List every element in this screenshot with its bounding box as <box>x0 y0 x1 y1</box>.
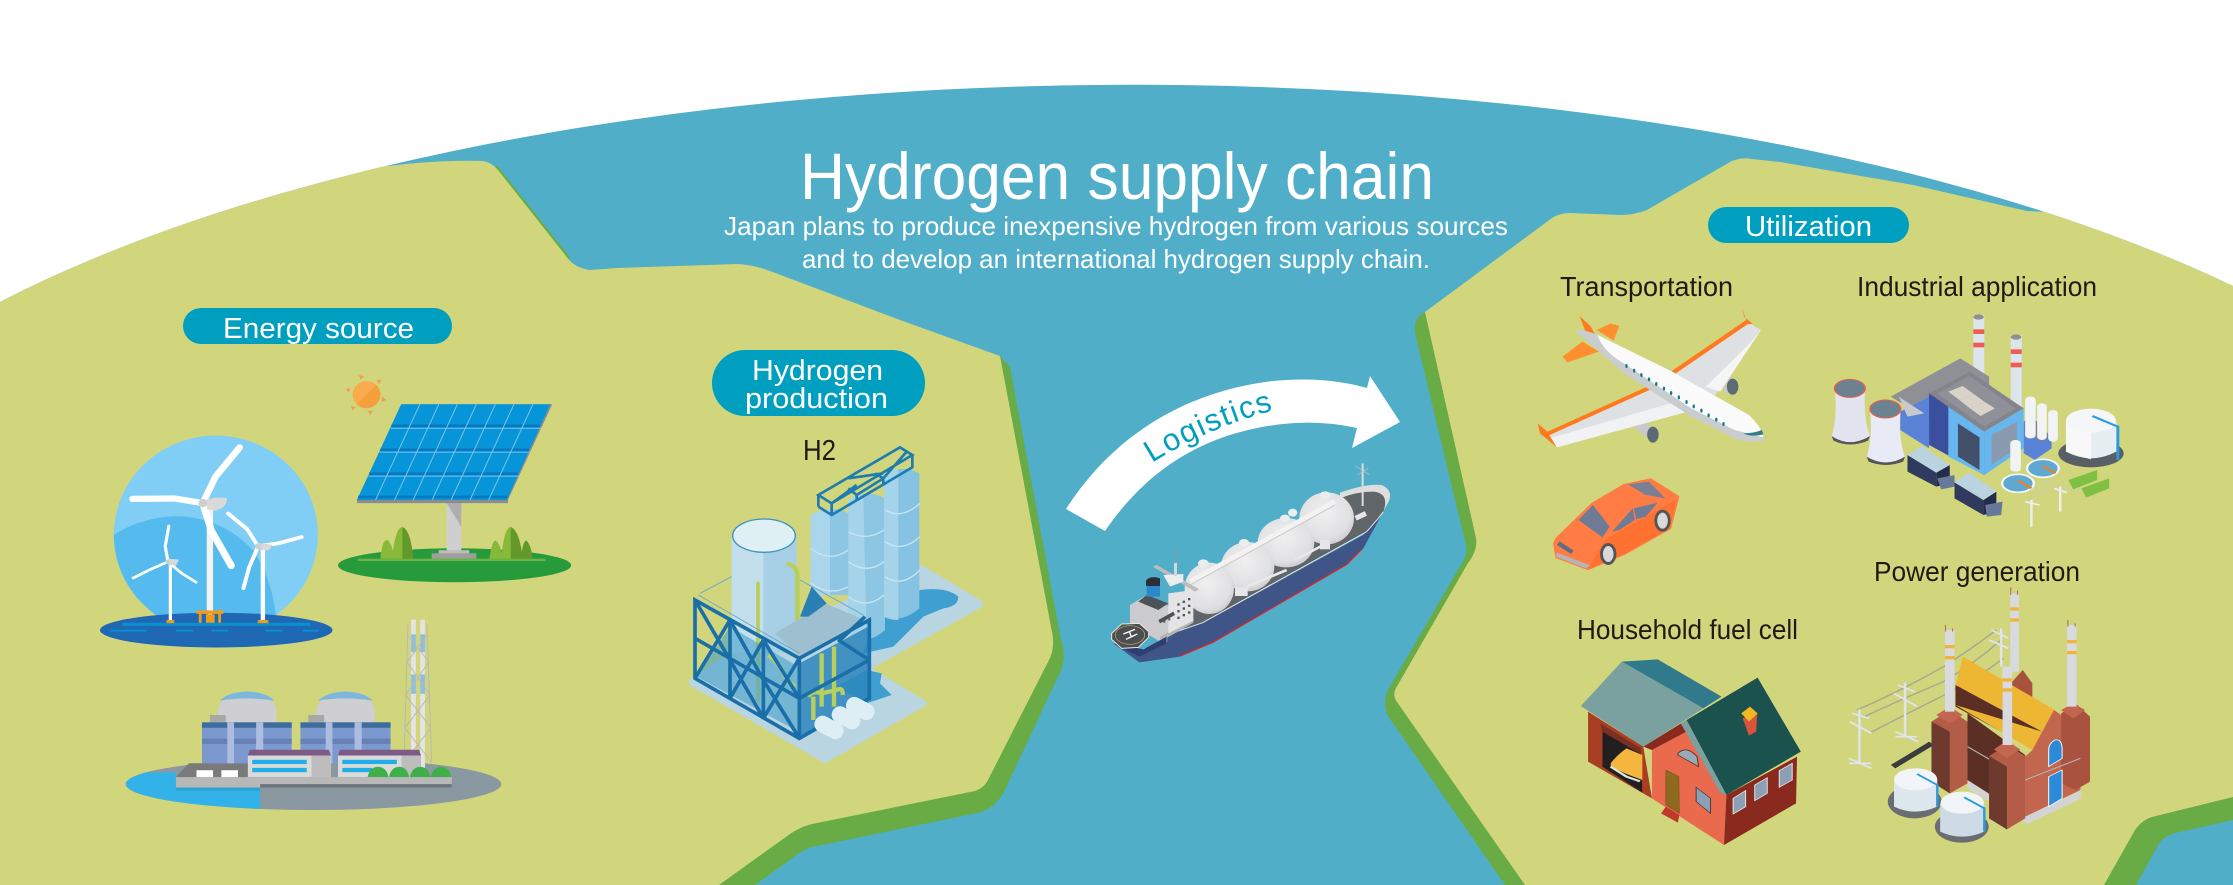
subtitle: and to develop an international hydrogen supply chain. <box>802 244 1430 274</box>
pill heading: utilization <box>1708 207 1909 243</box>
left land thin shore edge <box>496 167 569 259</box>
label: household fuel cell: Household fuel cell <box>1577 614 1798 645</box>
pill heading: energy source: Energy source <box>223 313 414 345</box>
H2 label: H2 <box>803 435 836 467</box>
subtitle: Japan plans to produce inexpensive hydrogen from various sources <box>724 211 1508 241</box>
chimneys <box>1945 587 2077 745</box>
containers <box>1907 446 2003 517</box>
pill heading: hydrogen production: production <box>745 383 888 415</box>
icon: car <box>1554 479 1678 569</box>
deck <box>775 603 865 656</box>
tanks <box>1185 492 1354 614</box>
icon: solar panel <box>338 375 571 582</box>
icon: hydrogen production plant <box>689 447 983 763</box>
left land shadow edge <box>719 356 1064 885</box>
bottom right bay shore <box>2104 797 2233 885</box>
pill heading: energy source <box>183 308 452 345</box>
silos <box>811 469 920 640</box>
clarifier ponds <box>2002 459 2059 492</box>
roofs <box>1581 659 1801 795</box>
pill heading: hydrogen production <box>712 350 925 416</box>
title: Hydrogen supply chain <box>800 139 1434 213</box>
brick towers <box>1931 703 2085 829</box>
label: industrial application: Industrial application <box>1857 271 2097 302</box>
chimney tower <box>404 620 432 768</box>
label: power generation: Power generation <box>1874 556 2080 587</box>
transmission lines <box>1849 628 2008 768</box>
pill heading: utilization: Utilization <box>1745 211 1872 243</box>
storage tank <box>2058 409 2124 467</box>
frame <box>695 600 869 738</box>
arrow: logistics: Logistics <box>1143 396 1271 462</box>
icon: house with fuel cell <box>1581 659 1801 845</box>
helipad <box>1112 623 1167 657</box>
small tanks <box>812 694 877 742</box>
icon: offshore wind turbines <box>100 436 332 647</box>
stacks <box>1973 314 2022 407</box>
truss <box>818 447 912 515</box>
icon: power plant with domes <box>126 620 501 813</box>
pill heading: hydrogen production: Hydrogen <box>752 355 883 387</box>
oil tanks <box>1888 768 1989 843</box>
subtitle <box>724 211 1508 274</box>
pylons and substation <box>2025 470 2109 527</box>
left land: energy source and hydrogen production <box>0 100 1053 885</box>
icon: LNG carrier ship <box>1112 463 1390 662</box>
main hall <box>1956 657 2090 817</box>
arrow: logistics <box>1066 376 1400 531</box>
superstructure <box>1130 549 1199 642</box>
right land shadow edge <box>1385 312 1525 885</box>
cooling towers <box>1832 379 1905 465</box>
icon: thermal power station <box>1849 587 2090 843</box>
label: transportation: Transportation <box>1560 271 1733 302</box>
bottom right bay water <box>2136 820 2233 885</box>
icon: airplane <box>1538 308 1764 447</box>
icon: industrial plant <box>1832 314 2124 527</box>
right land: utilization <box>1394 158 2233 885</box>
tall tank <box>732 519 797 653</box>
